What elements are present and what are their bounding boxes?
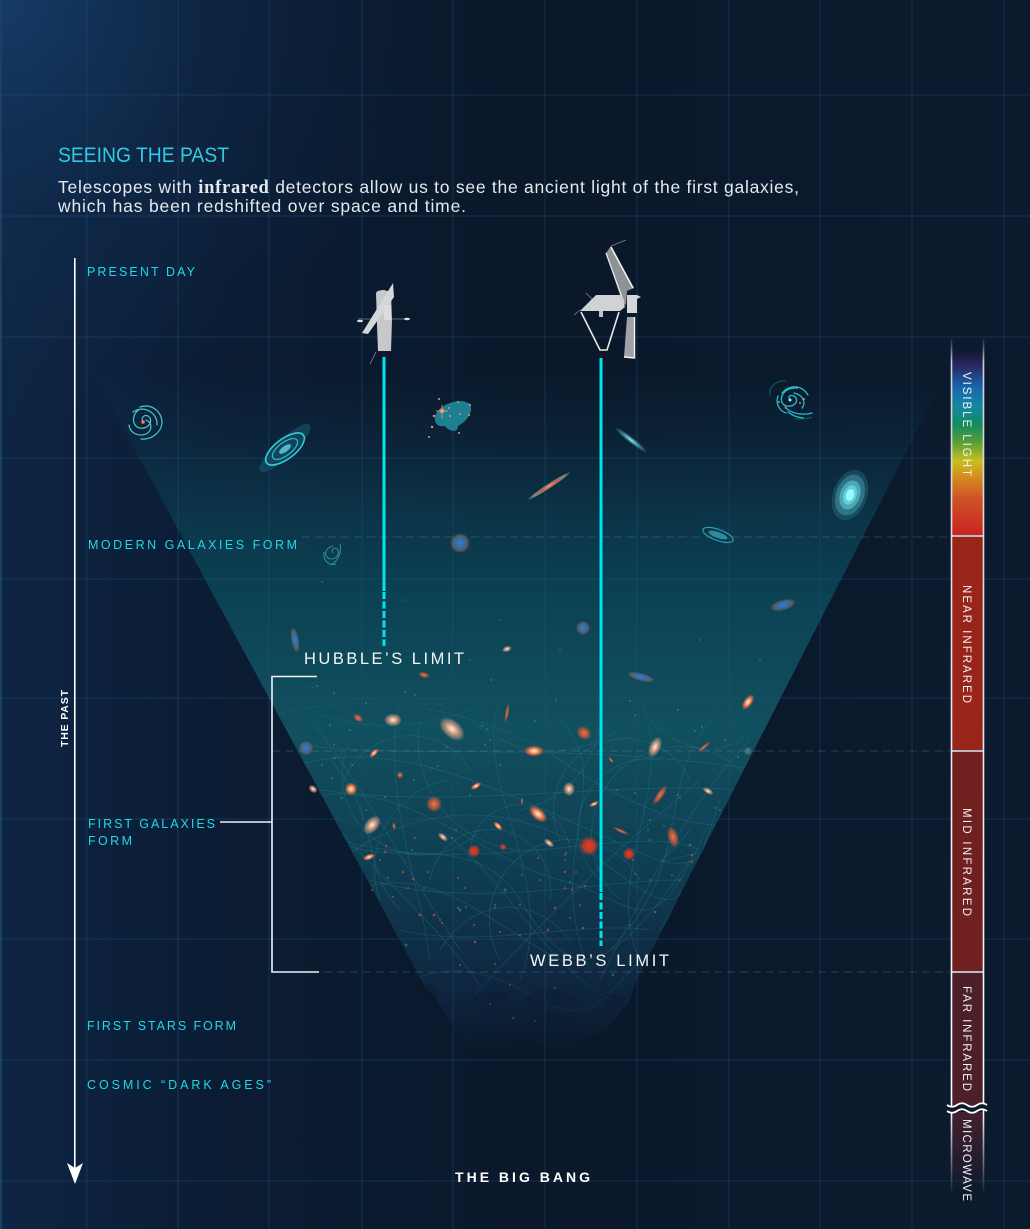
- timeline labels: FIRST STARS FORM: [87, 1019, 236, 1033]
- timeline labels: FORM: [88, 834, 132, 848]
- spectrum labels: FAR INFRARED: [960, 986, 972, 1091]
- near infrared band: [952, 537, 983, 750]
- hubble's limit label: HUBBLE’S LIMIT: [304, 650, 464, 668]
- intro text: Telescopes with infrared detectors allow us to see the ancient light of the first galaxies,: [58, 177, 799, 198]
- nearby galaxies: [129, 381, 875, 565]
- distant galaxies: [289, 533, 797, 862]
- past timeline arrow: [67, 258, 83, 1184]
- visible light band: [952, 350, 983, 535]
- electromagnetic spectrum bar: [947, 337, 987, 1201]
- timeline labels: MODERN GALAXIES FORM: [88, 538, 297, 552]
- dust dots: [311, 581, 761, 976]
- filaments of the cosmic web: [278, 704, 750, 1011]
- spectrum labels: NEAR INFRARED: [960, 585, 972, 703]
- bright elliptical galaxy: [825, 465, 875, 525]
- spiral galaxy left: [129, 406, 162, 439]
- the big bang label: THE BIG BANG: [455, 1169, 590, 1185]
- small ring galaxy: [701, 524, 735, 546]
- icon: hubble telescope: [357, 283, 410, 364]
- webb's limit label: WEBB’S LIMIT: [530, 952, 669, 970]
- spectrum labels: VISIBLE LIGHT: [960, 372, 972, 476]
- webb observation line: [600, 358, 602, 946]
- microwave band: [952, 1112, 983, 1196]
- blue edge-on galaxy: [612, 425, 650, 455]
- small spiral galaxy: [324, 544, 341, 565]
- spectrum labels: MICROWAVE: [960, 1119, 972, 1201]
- icon: webb telescope: [574, 240, 641, 358]
- far infrared band: [952, 973, 983, 1106]
- nebula galaxy: [428, 398, 471, 438]
- edge-on ring galaxy: [254, 418, 316, 478]
- timeline labels: FIRST GALAXIES: [88, 817, 215, 831]
- spiral galaxy right: [770, 381, 812, 419]
- red edge-on galaxy: [527, 470, 571, 502]
- red dots: [371, 829, 693, 1022]
- observable universe cone: [132, 419, 920, 1026]
- timeline labels: [87, 265, 297, 1092]
- spectrum rails: [952, 337, 984, 1196]
- the past label: THE PAST: [59, 689, 71, 747]
- first galaxies bracket: [220, 676, 319, 972]
- timeline labels: PRESENT DAY: [87, 265, 196, 279]
- mid infrared band: [952, 752, 983, 971]
- spectrum labels: [960, 372, 972, 1201]
- heading: SEEING THE PAST: [58, 144, 229, 167]
- timeline labels: COSMIC “DARK AGES”: [87, 1078, 271, 1092]
- band dividers: [952, 536, 983, 972]
- cosmic horizon dashed lines: [272, 537, 950, 972]
- hubble observation line: [382, 357, 386, 646]
- nebula base of the cone: [418, 983, 626, 1029]
- spectrum labels: MID INFRARED: [960, 808, 972, 916]
- spectrum break: [947, 1103, 987, 1113]
- intro text: which has been redshifted over space and time.: [57, 196, 466, 216]
